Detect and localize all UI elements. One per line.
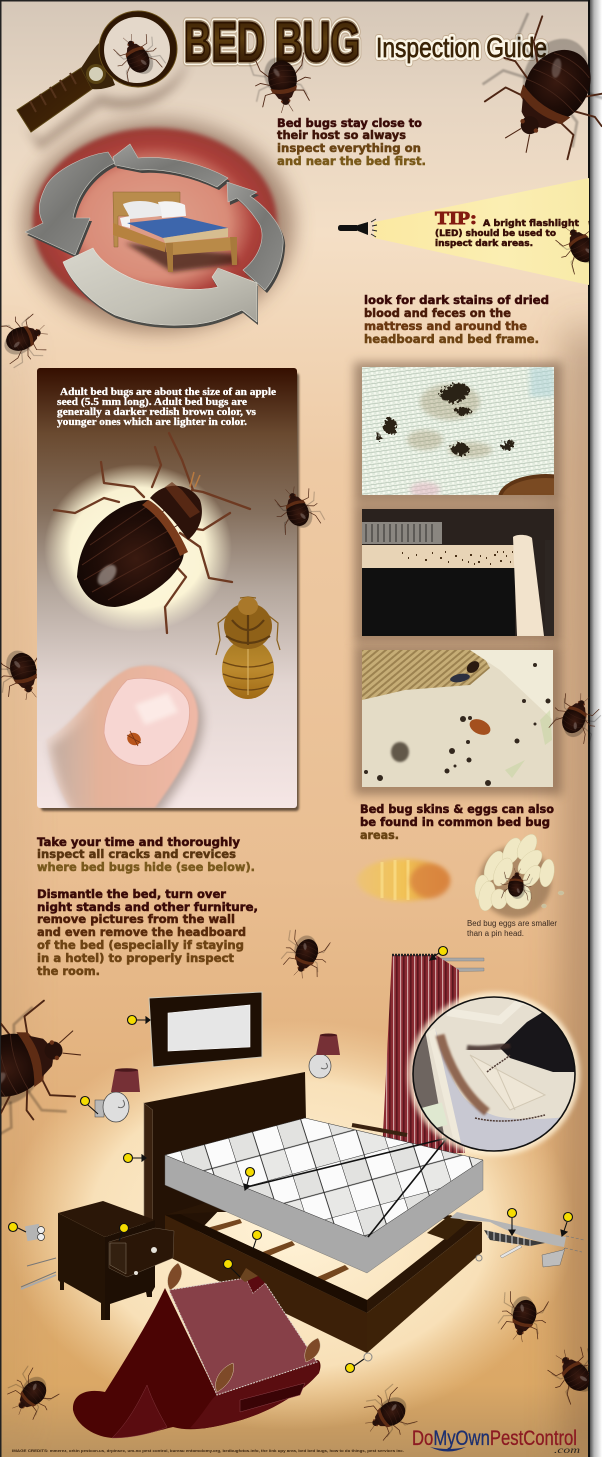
crevice text: in a hotel) to properly inspect	[37, 951, 235, 965]
wall outlet	[25, 1224, 44, 1241]
bed illustration	[113, 192, 237, 272]
panel text: Adult bed bugs are about the size of an apple	[60, 387, 277, 398]
intro text: inspect everything on	[277, 141, 421, 155]
crevice text: where bed bugs hide (see below).	[37, 860, 255, 874]
crevice text	[37, 835, 258, 978]
large bed bug top right	[462, 9, 602, 179]
logo: DoMyOwnPestControl.com: .com	[554, 1445, 581, 1455]
skins and eggs text: areas.	[360, 828, 399, 842]
stains text: mattress and around the	[364, 319, 527, 333]
logo: DoMyOwnPestControl.com: DoMyOwnPestControl	[412, 1427, 577, 1450]
crevice text: Take your time and thoroughly	[37, 835, 241, 849]
crevice text: of the bed (especially if staying	[37, 938, 244, 952]
wall picture frame	[149, 992, 262, 1067]
title: Bed Bug Inspection Guide: Inspection Guide	[376, 32, 547, 63]
bed frame and slats	[165, 1200, 482, 1361]
flashlight and beam with tip: A bright flashlight	[483, 219, 579, 229]
eggs caption: Bed bug eggs are smaller	[467, 919, 557, 928]
title: Bed Bug Inspection Guide: Inspection Guide	[376, 32, 547, 63]
bed bug above room	[276, 928, 333, 984]
thumb with small bed bug	[46, 666, 203, 813]
flashlight and beam with tip: inspect dark areas.	[435, 239, 533, 249]
baseboard vent and peeled wallpaper	[450, 1212, 584, 1267]
crevice text: Dismantle the bed, turn over	[37, 887, 226, 901]
nightstand	[21, 1201, 174, 1320]
headboard	[144, 1072, 306, 1240]
scattered bed bugs room	[0, 986, 602, 1447]
bottom arrow	[63, 248, 258, 328]
circular arrows around bed	[22, 120, 294, 332]
bed bug right of photos	[547, 686, 602, 746]
crevice text: and even remove the headboard	[37, 925, 246, 939]
eggs caption	[467, 919, 557, 938]
image credits: IMAGE CREDITS: mmerez, orkin pestcon.us, drpinsec, um-no pest control, bureau entomolomy.org, bedbugfotos.info, the link upy area, bed bed bugs, how to do things, pest services inc.	[12, 1448, 404, 1453]
panel text: generally a darker redish brown color, vs	[57, 407, 256, 418]
skins and eggs text: Bed bug skins & eggs can also	[360, 802, 554, 816]
skins and eggs text	[360, 802, 554, 842]
crevice text: the room.	[37, 964, 100, 978]
overturned sofa chair	[73, 1263, 320, 1438]
mattress box spring	[165, 1118, 483, 1273]
title: Bed Bug Inspection Guide: BED BUG	[184, 10, 360, 73]
stains text: look for dark stains of dried	[364, 293, 549, 307]
left arrow	[25, 152, 117, 258]
crevice text: inspect all cracks and crevices	[37, 847, 236, 861]
stains text	[364, 293, 549, 346]
crevice text: remove pictures from the wall	[37, 912, 235, 926]
inset circle: stained mattress seam photo	[408, 992, 580, 1156]
title: Bed Bug Inspection Guide: Inspection Guide	[376, 32, 547, 63]
title: Bed Bug Inspection Guide: BED BUG	[184, 10, 360, 73]
stains text: blood and feces on the	[364, 306, 511, 320]
stains text: headboard and bed frame.	[364, 332, 539, 346]
intro text: Bed bugs stay close to	[277, 116, 422, 130]
panel text	[57, 387, 277, 428]
wall lamp right	[309, 1034, 340, 1078]
photo: stains on mattress fabric	[348, 356, 567, 508]
bed bug on panel edge	[270, 481, 325, 535]
room glow background	[5, 1020, 575, 1430]
wall lamp left	[95, 1068, 140, 1122]
photo: bed frame with specks	[354, 504, 562, 644]
curtain and rod	[382, 955, 484, 1153]
panel: adult bed bugs	[37, 368, 299, 813]
bed bug left edge	[1, 314, 48, 368]
intro text: their host so always	[277, 128, 406, 142]
crevice text: night stands and other furniture,	[37, 900, 258, 914]
intro text: and near the bed first.	[277, 154, 426, 168]
bed bug behind panel left	[1, 650, 37, 700]
bed bug at flashlight beam	[555, 220, 589, 274]
title: Bed Bug Inspection Guide: BED BUG	[184, 10, 360, 73]
panel text: seed (5.5 mm long). Adult bed bugs are	[57, 397, 248, 408]
amber underside bug	[216, 597, 280, 699]
photo: live bugs and fecal spots	[354, 645, 562, 795]
title: Bed Bug Inspection Guide: BED BUG	[184, 10, 360, 73]
flashlight and beam with tip: TIP:	[435, 208, 477, 228]
bed bug eggs with bug	[474, 831, 564, 918]
panel text: younger ones which are lighter in color.	[57, 417, 248, 428]
right arrow	[227, 182, 285, 293]
eggs caption: than a pin head.	[467, 929, 524, 938]
bed bug under title	[249, 52, 315, 116]
flashlight and beam with tip	[338, 178, 589, 285]
glow behind main bug	[44, 464, 232, 632]
intro text	[277, 116, 426, 168]
location pins	[8, 946, 572, 1372]
magnifying glass with bed bug	[17, 11, 190, 150]
flashlight and beam with tip: (LED) should be used to	[435, 229, 556, 239]
main adult bed bug	[54, 433, 250, 633]
shed bed bug skin	[357, 859, 450, 901]
skins and eggs text: be found in common bed bug	[360, 815, 550, 829]
top arrow	[113, 144, 230, 190]
